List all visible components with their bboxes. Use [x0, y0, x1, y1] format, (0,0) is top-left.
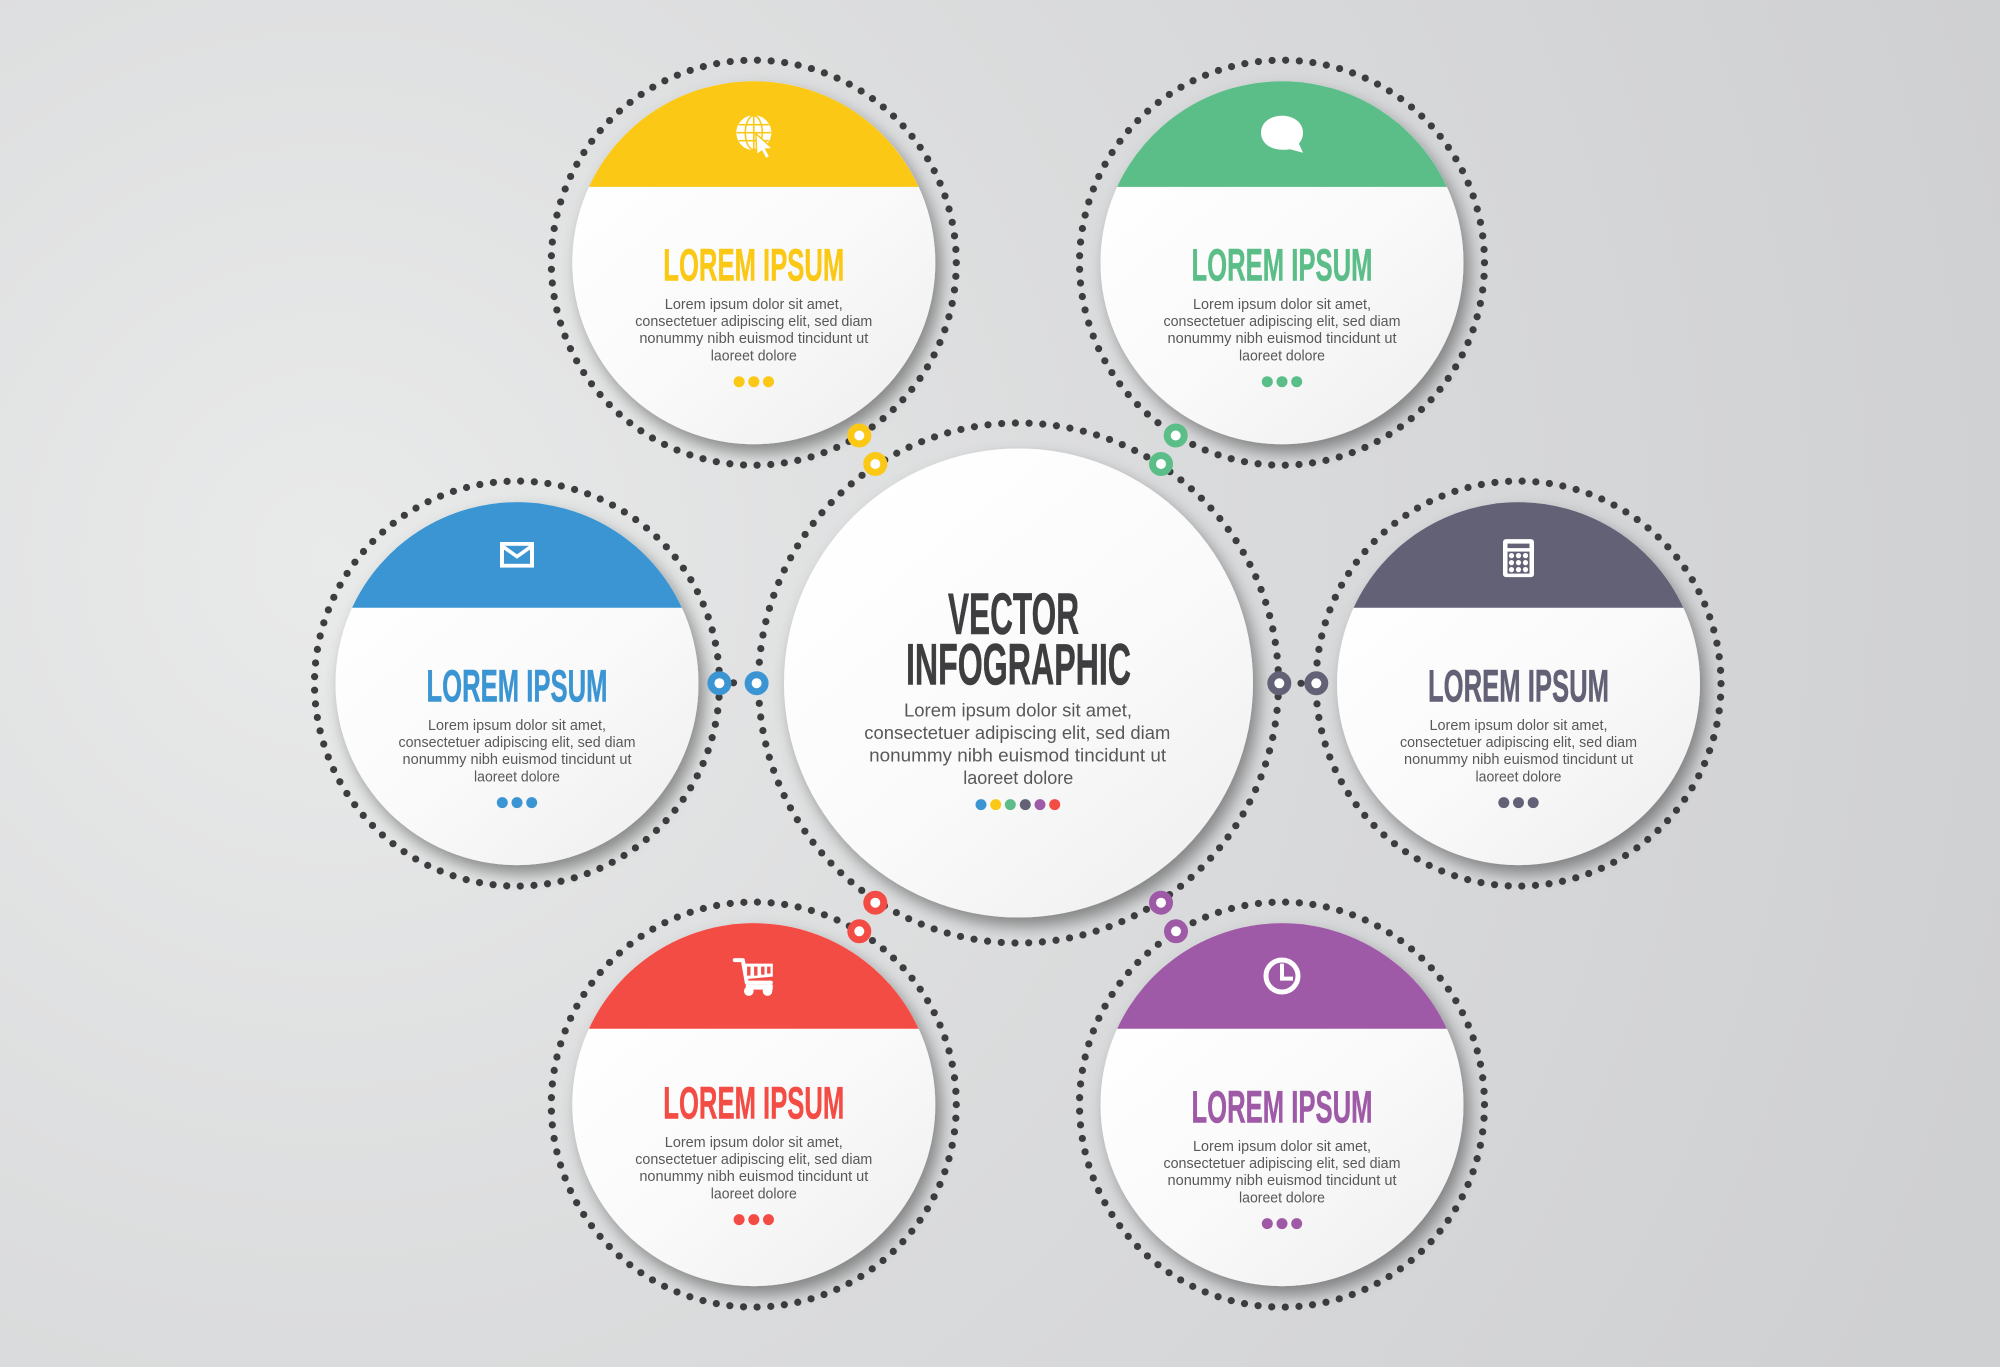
- connector: yellow: [851, 427, 884, 472]
- dots: [1262, 1218, 1302, 1229]
- text block: nonummy nibh euismod tincidunt ut: [1168, 331, 1396, 347]
- text block: laoreet dolore: [1239, 1191, 1325, 1207]
- dotted ring: blue: [314, 481, 720, 886]
- dotted ring: green: [1080, 60, 1484, 465]
- connector dot: blue: [730, 679, 737, 686]
- text block: consectetuer adipiscing elit, sed diam: [635, 314, 872, 330]
- text block: laoreet dolore: [711, 349, 797, 365]
- text block: Lorem ipsum dolor sit amet,: [1193, 1139, 1371, 1155]
- text block: [398, 718, 636, 786]
- text block: Lorem ipsum dolor sit amet,: [904, 700, 1132, 720]
- text block: Lorem ipsum dolor sit amet,: [665, 297, 843, 313]
- dotted ring: slate: [1316, 481, 1721, 886]
- text block: nonummy nibh euismod tincidunt ut: [869, 744, 1166, 766]
- text block: nonummy nibh euismod tincidunt ut: [639, 1169, 868, 1185]
- dots: [734, 376, 774, 387]
- text block: laoreet dolore: [1476, 770, 1562, 786]
- text block: [1164, 297, 1400, 365]
- text block: [1164, 1139, 1400, 1207]
- icon: globe with cursor: [736, 115, 773, 159]
- connector dot: slate: [1297, 680, 1305, 687]
- dots: [1498, 797, 1539, 808]
- dots: [497, 797, 537, 808]
- heading: LOREM IPSUM: [663, 1078, 844, 1129]
- text block: laoreet dolore: [963, 767, 1073, 788]
- dots: [734, 1214, 774, 1225]
- text block: [864, 700, 1170, 788]
- heading: LOREM IPSUM: [663, 240, 844, 291]
- text block: Lorem ipsum dolor sit amet,: [1430, 718, 1608, 734]
- panel: blue: [336, 502, 698, 865]
- dotted ring: centre: [758, 423, 1278, 943]
- text block: Lorem ipsum dolor sit amet,: [428, 718, 606, 734]
- panel: purple: [1100, 923, 1464, 1286]
- text block: laoreet dolore: [474, 770, 560, 786]
- text block: [635, 1135, 872, 1203]
- panel: green: [1100, 81, 1464, 444]
- text block: consectetuer adipiscing elit, sed diam: [635, 1152, 872, 1168]
- text block: nonummy nibh euismod tincidunt ut: [1168, 1173, 1396, 1189]
- text block: consectetuer adipiscing elit, sed diam: [864, 722, 1170, 743]
- text block: Lorem ipsum dolor sit amet,: [1193, 297, 1371, 313]
- connector: green: [1152, 427, 1184, 472]
- text block: consectetuer adipiscing elit, sed diam: [1400, 735, 1637, 751]
- heading: LOREM IPSUM: [1428, 661, 1609, 712]
- text block: Lorem ipsum dolor sit amet,: [665, 1135, 843, 1151]
- title: INFOGRAPHIC: [906, 632, 1131, 698]
- connector: red: [851, 894, 884, 940]
- text block: consectetuer adipiscing elit, sed diam: [398, 735, 636, 751]
- dots: [1262, 376, 1302, 387]
- text block: laoreet dolore: [711, 1187, 797, 1203]
- dotted ring: purple: [1080, 902, 1484, 1307]
- text block: [1400, 718, 1637, 786]
- title: [906, 582, 1131, 698]
- icon: speech bubble: [1261, 116, 1303, 153]
- icon: envelope: [500, 542, 534, 568]
- text block: laoreet dolore: [1239, 349, 1325, 365]
- dotted ring: yellow: [551, 60, 956, 465]
- text block: nonummy nibh euismod tincidunt ut: [1404, 752, 1633, 768]
- connector: slate: [1271, 675, 1325, 692]
- text block: nonummy nibh euismod tincidunt ut: [403, 752, 631, 768]
- heading: LOREM IPSUM: [427, 661, 607, 712]
- text block: [635, 297, 872, 365]
- title: VECTOR: [948, 582, 1079, 647]
- text block: consectetuer adipiscing elit, sed diam: [1164, 314, 1400, 330]
- text block: nonummy nibh euismod tincidunt ut: [639, 331, 868, 347]
- text block: consectetuer adipiscing elit, sed diam: [1164, 1156, 1400, 1172]
- panel: slate: [1337, 502, 1700, 865]
- connector: purple: [1152, 894, 1184, 940]
- panel: centre: [784, 448, 1253, 918]
- panel: red: [572, 923, 935, 1286]
- icon: calculator: [1503, 539, 1534, 577]
- heading: LOREM IPSUM: [1192, 240, 1372, 291]
- dotted ring: red: [551, 902, 956, 1307]
- panel: yellow: [572, 81, 935, 444]
- icon: clock: [1266, 960, 1298, 992]
- icon: shopping cart: [735, 960, 773, 996]
- connector: blue: [711, 675, 765, 692]
- dots: [976, 799, 1060, 810]
- heading: LOREM IPSUM: [1192, 1082, 1372, 1133]
